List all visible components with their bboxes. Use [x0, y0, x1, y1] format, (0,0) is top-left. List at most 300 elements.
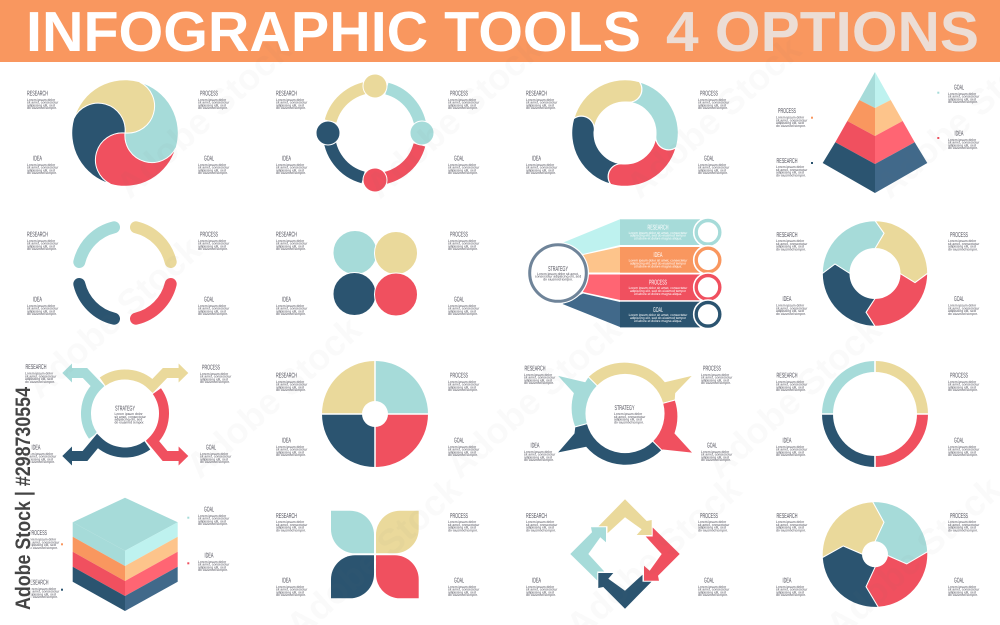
label: research: sit amet, consectetur [776, 523, 808, 527]
label: research: adipiscing elit, sed [276, 526, 304, 530]
label: research [776, 513, 808, 532]
label: idea: sit amet, consectetur [276, 307, 308, 311]
label: research: RESEARCH [276, 90, 297, 98]
label: research [276, 90, 308, 110]
label: idea: do eiusmod tempor. [948, 146, 978, 150]
label: process [948, 232, 980, 252]
arrow: yellow [103, 364, 188, 386]
chart: rounded arcs [79, 227, 171, 319]
watermark: diagonal stock marks: Adobe Stock [178, 308, 370, 486]
label: goal: GOAL [204, 506, 214, 514]
label: process: Lorem ipsum dolor [698, 98, 727, 102]
label: research: adipiscing elit, sed [776, 385, 804, 389]
center strategy text: STRATEGY [614, 405, 635, 412]
label: idea: adipiscing elit, sed [27, 309, 55, 313]
label: goal: GOAL [454, 296, 464, 304]
center strategy text: adipiscing elit, sed [114, 418, 142, 422]
label: process: sit amet, consectetur [948, 523, 980, 527]
label: research: adipiscing elit, sed [776, 526, 804, 530]
label: idea [276, 578, 308, 597]
label: research [776, 232, 808, 252]
panel: quarter pie [276, 358, 480, 470]
panel: arrow ring [776, 221, 980, 326]
label: idea [276, 156, 308, 175]
label: goal: Lorem ipsum dolor [448, 445, 477, 449]
label: research [27, 90, 59, 110]
watermark: diagonal stock marks: Adobe Stock [18, 228, 210, 406]
label: process: adipiscing elit, sed [28, 543, 56, 547]
label: process: PROCESS [450, 232, 468, 238]
label: goal: GOAL [206, 444, 216, 452]
label: process [701, 366, 733, 385]
label: research: sit amet, consectetur [776, 168, 808, 172]
subtitle: 4 OPTIONS [666, 0, 979, 63]
label: idea [526, 578, 558, 597]
center strategy text: sit amet, consectetur [114, 415, 147, 419]
label: process: do eiusmod tempor. [698, 528, 728, 532]
label: research [276, 513, 308, 532]
label: research: do eiusmod tempor. [28, 595, 58, 599]
bar: research: Lorem ipsum dolor sit amet, consectetur [629, 231, 688, 235]
watermark: diagonal stock marks: Adobe Stock [358, 28, 550, 206]
label: goal: adipiscing elit, sed [448, 590, 476, 594]
label: process: do eiusmod tempor. [448, 247, 478, 251]
label: process: sit amet, consectetur [448, 101, 480, 105]
label: idea: IDEA [32, 444, 41, 452]
label: research: RESEARCH [526, 90, 547, 98]
label: research: adipiscing elit, sed [526, 103, 554, 107]
panel: thin ring [776, 358, 980, 470]
label: goal: do eiusmod tempor. [448, 593, 478, 597]
watermark: diagonal stock marks: Adobe Stock [438, 308, 630, 486]
label: idea: Lorem ipsum dolor [27, 304, 56, 308]
label: research [276, 372, 308, 392]
panel: crossing arrows [25, 364, 232, 466]
label: process: sit amet, consectetur [448, 383, 480, 387]
label: idea [526, 156, 558, 175]
label: research [776, 158, 808, 178]
label: process: Lorem ipsum dolor [448, 239, 477, 243]
label: process: Lorem ipsum dolor [198, 239, 227, 243]
label: idea: adipiscing elit, sed [198, 565, 226, 569]
label: process: sit amet, consectetur [28, 540, 60, 544]
label: research [28, 580, 60, 599]
label: goal: Lorem ipsum dolor [198, 514, 227, 518]
label: goal: sit amet, consectetur [198, 166, 230, 170]
label: research [27, 232, 59, 251]
label: research: adipiscing elit, sed [27, 103, 55, 107]
label: idea [25, 444, 57, 464]
label: research [524, 366, 556, 385]
label: research: sit amet, consectetur [526, 101, 558, 105]
label: idea: adipiscing elit, sed [526, 168, 554, 172]
label: idea: do eiusmod tempor. [27, 312, 57, 316]
label: idea: sit amet, consectetur [276, 166, 308, 170]
panel: rounded ring [27, 227, 230, 319]
panel: petals [276, 511, 480, 598]
label: idea: Lorem ipsum dolor [276, 585, 305, 589]
label: research: Lorem ipsum dolor [276, 520, 305, 524]
label: research: do eiusmod tempor. [776, 248, 806, 252]
label: process: Lorem ipsum dolor [948, 380, 977, 384]
label: process: sit amet, consectetur [698, 101, 730, 105]
bar: idea: ut labore et dolore magna aliqua. [634, 264, 682, 268]
arrow: red [153, 391, 188, 466]
label: goal: adipiscing elit, sed [948, 97, 976, 101]
label: idea [198, 552, 230, 572]
panel: pyramid [776, 72, 980, 193]
label: goal: do eiusmod tempor. [948, 100, 978, 104]
label: idea: do eiusmod tempor. [524, 458, 554, 462]
label: process [448, 90, 480, 110]
label: process: PROCESS [200, 232, 218, 238]
label: goal: adipiscing elit, sed [698, 590, 726, 594]
bar: goal: adipiscing elit, sed do eiusmod tempor [630, 316, 687, 320]
label: goal: adipiscing elit, sed [698, 168, 726, 172]
label: idea: adipiscing elit, sed [776, 450, 804, 454]
label: idea: Lorem ipsum dolor [276, 163, 305, 167]
label: idea: adipiscing elit, sed [276, 309, 304, 313]
label: research: sit amet, consectetur [776, 242, 808, 246]
label: idea: IDEA [33, 156, 42, 162]
label: process: sit amet, consectetur [448, 242, 480, 246]
label: idea: Lorem ipsum dolor [27, 163, 56, 167]
chart: ring with nodes [316, 74, 434, 192]
strategy circle: STRATEGY [548, 266, 568, 273]
header banner [0, 0, 1000, 63]
chart: thin donut [819, 358, 931, 470]
label: idea: do eiusmod tempor. [526, 593, 556, 597]
label: process: adipiscing elit, sed [701, 378, 729, 382]
bar: process [620, 274, 700, 300]
label: idea: Lorem ipsum dolor [25, 452, 54, 456]
label: process: do eiusmod tempor. [200, 380, 230, 384]
label: research: do eiusmod tempor. [276, 528, 306, 532]
center strategy text: do eiusmod tempor. [114, 420, 144, 424]
label: idea: do eiusmod tempor. [276, 453, 306, 457]
label: goal: adipiscing elit, sed [448, 168, 476, 172]
strategy circle: Lorem ipsum dolor sit amet, [537, 272, 579, 276]
label: idea: sit amet, consectetur [524, 453, 556, 457]
label: goal: sit amet, consectetur [448, 588, 480, 592]
label: process: PROCESS [450, 90, 468, 98]
label: goal: Lorem ipsum dolor [448, 163, 477, 167]
label: idea: do eiusmod tempor. [198, 568, 228, 572]
label: research: Lorem ipsum dolor [276, 380, 305, 384]
panel: strategy fan with bars [527, 218, 723, 329]
label: goal: Lorem ipsum dolor [698, 163, 727, 167]
label: goal: sit amet, consectetur [198, 307, 230, 311]
chart: diamond cycle [570, 499, 680, 609]
bar: process: ut labore et dolore magna aliqua. [634, 292, 682, 296]
chart: ring with spikes [557, 362, 693, 465]
label: goal: GOAL [954, 84, 964, 92]
label: goal: GOAL [954, 578, 964, 584]
label: research: RESEARCH [524, 366, 546, 372]
label: research: Lorem ipsum dolor [25, 372, 54, 376]
chart: chevron pie [822, 502, 928, 607]
label: idea [276, 296, 308, 316]
label: idea [948, 130, 980, 150]
label: goal: sit amet, consectetur [698, 166, 730, 170]
label: process [28, 530, 60, 550]
bar: research: RESEARCH [648, 224, 668, 232]
label: goal: GOAL [454, 578, 464, 584]
label: idea: IDEA [282, 296, 291, 304]
label: research: sit amet, consectetur [526, 523, 558, 527]
center strategy text: Lorem ipsum dolor [114, 412, 143, 416]
bar: research: ut labore et dolore magna aliqua. [634, 237, 682, 241]
label: idea: Lorem ipsum dolor [276, 445, 305, 449]
bar: idea: IDEA [654, 252, 663, 259]
panel: swirl circle [27, 80, 230, 186]
label: process: adipiscing elit, sed [448, 385, 476, 389]
label: process: adipiscing elit, sed [698, 526, 726, 530]
label: research: sit amet, consectetur [276, 383, 308, 387]
label: research: sit amet, consectetur [25, 374, 57, 378]
label: process: sit amet, consectetur [948, 242, 980, 246]
label: process: Lorem ipsum dolor [776, 115, 805, 119]
label: process: do eiusmod tempor. [198, 106, 228, 110]
label: goal: Lorem ipsum dolor [448, 585, 477, 589]
label: idea: sit amet, consectetur [276, 588, 308, 592]
label: process [448, 232, 480, 251]
marker: process [811, 117, 813, 119]
label: goal [698, 156, 730, 175]
marker: research [61, 589, 63, 591]
label: process: adipiscing elit, sed [948, 245, 976, 249]
label: process: PROCESS [950, 232, 968, 239]
label: idea: IDEA [282, 578, 291, 584]
label: research: do eiusmod tempor. [776, 388, 806, 392]
bar: process: Lorem ipsum dolor sit amet, consectetur [629, 286, 688, 290]
label: process [198, 90, 230, 110]
label: goal: GOAL [204, 156, 214, 162]
label: research: adipiscing elit, sed [28, 592, 56, 596]
label: idea: sit amet, consectetur [526, 588, 558, 592]
label: goal: Lorem ipsum dolor [948, 304, 977, 308]
label: research: RESEARCH [776, 513, 798, 520]
label: process: Lorem ipsum dolor [448, 380, 477, 384]
label: process: Lorem ipsum dolor [448, 520, 477, 524]
label: goal: adipiscing elit, sed [948, 450, 976, 454]
watermark: diagonal stock marks: Adobe Stock [618, 28, 810, 206]
label: idea: sit amet, consectetur [25, 455, 57, 459]
label: goal: Lorem ipsum dolor [698, 585, 727, 589]
panel: layered cube [28, 498, 230, 611]
strategy circle: consectetur adipiscing elit, sed [535, 275, 581, 279]
label: goal [448, 296, 480, 316]
label: research: do eiusmod tempor. [526, 106, 556, 110]
label: goal: adipiscing elit, sed [948, 590, 976, 594]
label: research: sit amet, consectetur [776, 383, 808, 387]
label: research: do eiusmod tempor. [276, 388, 306, 392]
label: process: adipiscing elit, sed [198, 103, 226, 107]
label: idea: adipiscing elit, sed [276, 590, 304, 594]
label: research: do eiusmod tempor. [25, 380, 55, 384]
bar: process: adipiscing elit, sed do eiusmod tempor [630, 289, 687, 293]
label: research: RESEARCH [276, 513, 297, 520]
label: idea: Lorem ipsum dolor [776, 304, 805, 308]
label: research: Lorem ipsum dolor [276, 98, 305, 102]
label: process: PROCESS [778, 108, 796, 115]
label: research: Lorem ipsum dolor [526, 98, 555, 102]
label: research: Lorem ipsum dolor [27, 98, 56, 102]
label: idea: IDEA [282, 156, 291, 162]
label: goal: Lorem ipsum dolor [198, 304, 227, 308]
label: idea: do eiusmod tempor. [25, 460, 55, 464]
label: research: adipiscing elit, sed [776, 171, 804, 175]
label: research: RESEARCH [276, 232, 297, 238]
label: process: sit amet, consectetur [200, 375, 232, 379]
chart: swirl [72, 80, 178, 186]
label: research: adipiscing elit, sed [25, 377, 53, 381]
label: goal: do eiusmod tempor. [198, 312, 228, 316]
label: research: RESEARCH [28, 580, 48, 586]
label: process: sit amet, consectetur [448, 523, 480, 527]
label: process: sit amet, consectetur [698, 523, 730, 527]
label: goal: GOAL [707, 442, 717, 450]
label: process: adipiscing elit, sed [776, 121, 804, 125]
label: research: Lorem ipsum dolor [27, 239, 56, 243]
label: research: sit amet, consectetur [276, 101, 308, 105]
label: research [526, 90, 558, 110]
label: idea: IDEA [282, 438, 291, 444]
label: process: adipiscing elit, sed [448, 103, 476, 107]
label: process: adipiscing elit, sed [948, 526, 976, 530]
label: research [526, 513, 558, 532]
bar: goal: GOAL [653, 307, 663, 314]
title: INFOGRAPHIC TOOLS [26, 0, 641, 63]
panel: diamond arrows [526, 499, 730, 609]
label: process: sit amet, consectetur [776, 118, 808, 122]
label: research: sit amet, consectetur [524, 376, 556, 380]
label: process: adipiscing elit, sed [698, 103, 726, 107]
label: idea: Lorem ipsum dolor [276, 304, 305, 308]
label: research: Lorem ipsum dolor [526, 520, 555, 524]
label: research: do eiusmod tempor. [776, 528, 806, 532]
label: process: do eiusmod tempor. [448, 528, 478, 532]
label: goal: do eiusmod tempor. [198, 522, 228, 526]
label: idea: adipiscing elit, sed [276, 450, 304, 454]
label: process [200, 364, 232, 384]
label: goal: GOAL [204, 296, 214, 304]
chart: chevron donut [822, 221, 928, 326]
label: goal: do eiusmod tempor. [448, 453, 478, 457]
label: goal: sit amet, consectetur [698, 588, 730, 592]
label: goal: Lorem ipsum dolor [200, 452, 229, 456]
label: goal: sit amet, consectetur [448, 307, 480, 311]
label: goal [948, 438, 980, 457]
label: goal [198, 156, 230, 175]
label: idea: Lorem ipsum dolor [948, 138, 977, 142]
label: process [698, 90, 730, 110]
label: idea: sit amet, consectetur [776, 306, 808, 310]
label: research: Lorem ipsum dolor [776, 239, 805, 243]
label: idea: Lorem ipsum dolor [524, 450, 553, 454]
label: goal [198, 506, 230, 526]
label: goal: adipiscing elit, sed [198, 519, 226, 523]
label: idea: Lorem ipsum dolor [526, 163, 555, 167]
label: process [448, 372, 480, 392]
label: process [776, 108, 808, 128]
label: process: do eiusmod tempor. [448, 388, 478, 392]
label: idea: Lorem ipsum dolor [198, 560, 227, 564]
label: process: do eiusmod tempor. [948, 248, 978, 252]
label: goal: sit amet, consectetur [448, 166, 480, 170]
label: goal: sit amet, consectetur [948, 95, 980, 99]
label: process: PROCESS [202, 364, 220, 372]
label: process: Lorem ipsum dolor [200, 372, 229, 376]
label: process: adipiscing elit, sed [448, 244, 476, 248]
label: process: PROCESS [700, 513, 718, 520]
label: idea: sit amet, consectetur [526, 166, 558, 170]
label: idea: adipiscing elit, sed [27, 168, 55, 172]
center strategy text: sit amet, consectetur [614, 415, 646, 419]
label: research: Lorem ipsum dolor [28, 587, 57, 591]
center strategy text [614, 405, 646, 424]
label: research: do eiusmod tempor. [276, 247, 306, 251]
label: goal: GOAL [704, 156, 714, 162]
label: goal: adipiscing elit, sed [200, 457, 228, 461]
panel: swirl ring [526, 80, 730, 186]
center strategy text: Lorem ipsum dolor [614, 412, 643, 416]
label: research: sit amet, consectetur [28, 590, 60, 594]
label: goal: sit amet, consectetur [198, 517, 230, 521]
panel: spiked ring [524, 362, 733, 465]
label: idea: do eiusmod tempor. [776, 593, 806, 597]
label: research: do eiusmod tempor. [526, 528, 556, 532]
label: goal: Lorem ipsum dolor [701, 450, 730, 454]
label: idea: do eiusmod tempor. [27, 171, 57, 175]
label: process: sit amet, consectetur [701, 376, 733, 380]
label: goal: do eiusmod tempor. [948, 312, 978, 316]
label: idea: do eiusmod tempor. [776, 312, 806, 316]
label: research: sit amet, consectetur [27, 101, 59, 105]
arrows [62, 364, 188, 466]
label: idea: IDEA [782, 578, 792, 584]
panel: arrow pie [776, 502, 980, 607]
label: idea: adipiscing elit, sed [776, 309, 804, 313]
label: idea: Lorem ipsum dolor [776, 445, 805, 449]
label: process: do eiusmod tempor. [28, 546, 58, 550]
label: research: Lorem ipsum dolor [776, 380, 805, 384]
label: goal [448, 156, 480, 175]
label: goal [698, 578, 730, 597]
arrow: teal [62, 364, 97, 436]
label: research: do eiusmod tempor. [27, 247, 57, 251]
label: research: RESEARCH [26, 364, 46, 371]
label: research: RESEARCH [776, 372, 798, 380]
label: research: RESEARCH [776, 232, 798, 239]
label: goal: sit amet, consectetur [948, 306, 980, 310]
label: process: PROCESS [703, 366, 721, 372]
label: goal [948, 296, 980, 316]
label: goal: GOAL [454, 438, 464, 444]
label: process: Lorem ipsum dolor [948, 239, 977, 243]
label: idea: IDEA [33, 296, 42, 304]
label: goal [200, 444, 232, 464]
label: idea: IDEA [532, 578, 541, 584]
label: research: RESEARCH [526, 513, 547, 520]
marker: process [61, 543, 63, 545]
label: research [276, 232, 308, 251]
label: idea: adipiscing elit, sed [25, 457, 53, 461]
label: idea: IDEA [782, 296, 792, 303]
label: process: adipiscing elit, sed [948, 385, 976, 389]
label: goal [948, 578, 980, 597]
label: idea: sit amet, consectetur [27, 166, 59, 170]
